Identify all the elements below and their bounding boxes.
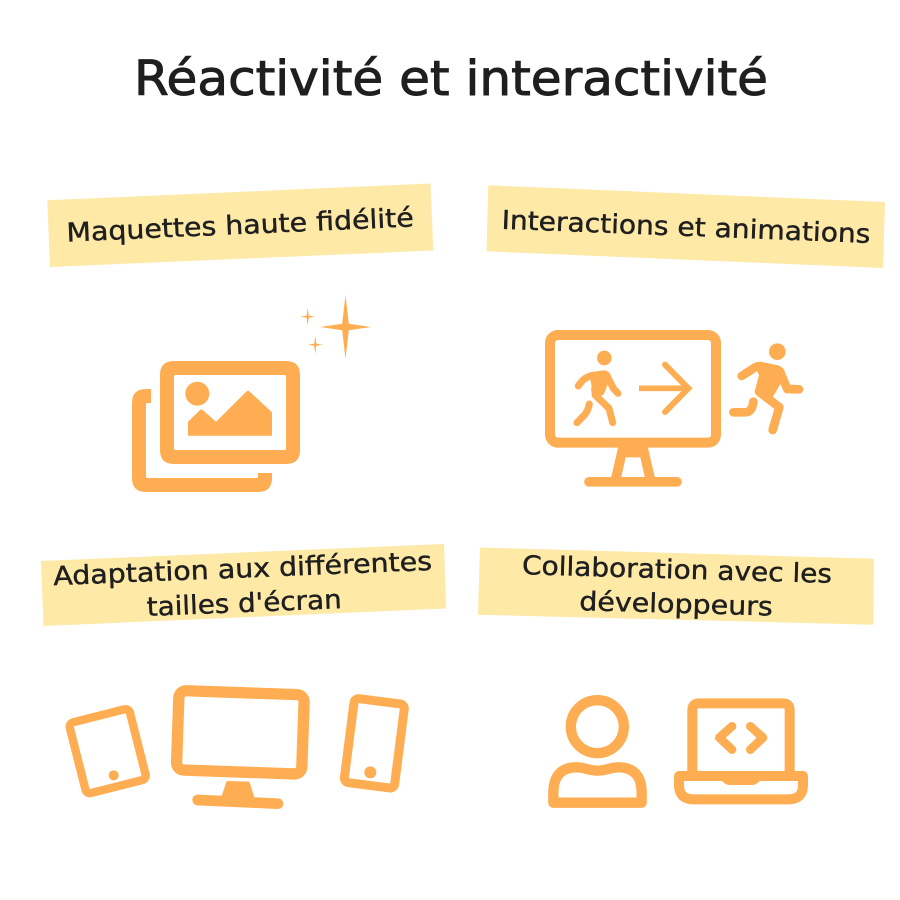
panel: maquettes haute fidélité [47, 184, 433, 492]
icon: developer and laptop [553, 700, 803, 803]
panel: collaboration avec les développeurs [478, 548, 874, 803]
icon: images and sparkles [132, 295, 371, 492]
heading: adaptation: tailles d'écran [146, 585, 342, 623]
heading: interactions: Interactions et animations [501, 206, 871, 250]
label background: adaptation [41, 544, 446, 626]
heading: adaptation [53, 547, 433, 623]
icon: tablet, monitor and phone [69, 691, 405, 804]
label background: interactions [486, 185, 885, 268]
heading: collaboration: Collaboration avec les [522, 551, 832, 590]
icon: monitor with runners [550, 335, 799, 482]
title: Réactivité et interactivité [134, 51, 768, 107]
heading: collaboration [522, 551, 832, 622]
label background: collaboration [478, 548, 874, 625]
heading: collaboration: développeurs [579, 587, 773, 622]
panel: adaptation aux tailles d'écran [41, 544, 446, 804]
label background: maquettes [47, 184, 433, 267]
heading: maquettes: Maquettes haute fidélité [66, 203, 414, 249]
heading: adaptation: Adaptation aux différentes [53, 547, 433, 592]
panel: interactions et animations [486, 185, 885, 482]
